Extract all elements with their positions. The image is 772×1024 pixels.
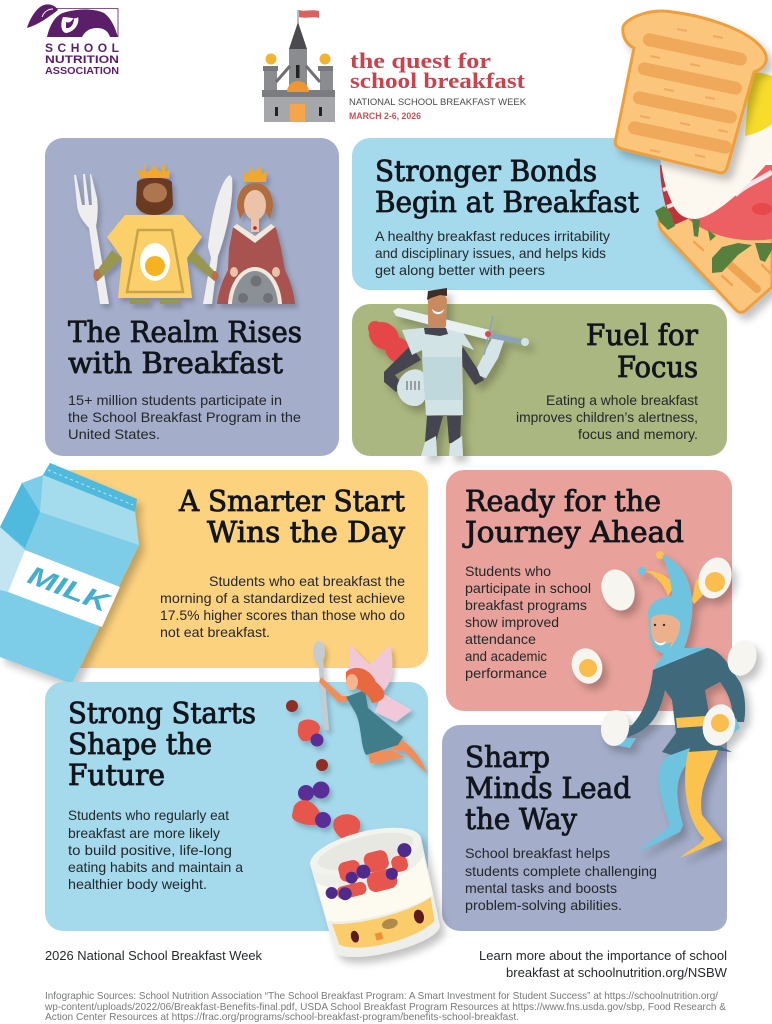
king bbox=[94, 164, 218, 304]
lettuce bbox=[655, 206, 772, 273]
illustration: milk carton bbox=[0, 463, 139, 684]
top toast bbox=[615, 11, 766, 173]
panel: Stronger Bonds bbox=[352, 138, 740, 290]
body text bbox=[68, 393, 301, 442]
footer call to action: Learn more about the importance of school bbox=[479, 949, 727, 963]
heading: Shape the bbox=[68, 727, 212, 761]
sources bbox=[44, 991, 726, 1023]
heading bbox=[586, 318, 698, 384]
heading: The Realm Rises bbox=[68, 315, 302, 349]
logo wordmark: NUTRITION bbox=[45, 54, 119, 66]
helmet bbox=[397, 369, 428, 406]
heading bbox=[465, 740, 631, 836]
body text: and academic bbox=[465, 649, 547, 664]
heading bbox=[375, 154, 639, 219]
body text: Students who eat breakfast the bbox=[209, 574, 405, 589]
logo: School Nutrition Association bbox=[27, 4, 119, 77]
body text: Students who bbox=[465, 564, 551, 579]
body text: performance bbox=[465, 666, 547, 681]
event title: NATIONAL SCHOOL BREAKFAST WEEK bbox=[349, 97, 527, 108]
body text: United States. bbox=[68, 427, 160, 442]
face bbox=[651, 614, 680, 650]
body text: 17.5% higher scores than those who do bbox=[160, 608, 405, 623]
heading: Future bbox=[68, 758, 165, 792]
footer call to action bbox=[479, 949, 727, 980]
body text: the School Breakfast Program in the bbox=[68, 410, 301, 425]
panel: Strong Starts bbox=[45, 682, 428, 931]
body text: A healthy breakfast reduces irritability bbox=[375, 229, 610, 244]
legs bbox=[638, 748, 690, 852]
body text bbox=[465, 846, 657, 913]
heading: Stronger Bonds bbox=[375, 154, 597, 188]
heading: Wins the Day bbox=[207, 515, 406, 549]
footer call to action: breakfast at schoolnutrition.org/NSBW bbox=[506, 966, 727, 980]
body text: attendance bbox=[465, 632, 536, 647]
panel: Ready for the Journey bbox=[446, 470, 732, 711]
body text bbox=[465, 564, 591, 681]
panel: A Smarter Start bbox=[55, 470, 428, 668]
plume bbox=[363, 316, 416, 368]
heading bbox=[462, 484, 684, 549]
heading: Strong Starts bbox=[68, 696, 256, 730]
body text: improves children’s alertness, bbox=[516, 410, 698, 425]
body text: students complete challenging bbox=[465, 864, 657, 879]
illustration: king, queen, fork and knife bbox=[74, 164, 295, 304]
heading bbox=[68, 696, 256, 792]
body text: breakfast programs bbox=[465, 598, 587, 613]
panel: The Realm Rises bbox=[45, 138, 339, 456]
heading bbox=[68, 315, 302, 380]
body text bbox=[375, 229, 610, 278]
body text: 15+ million students participate in bbox=[68, 393, 282, 408]
hood bbox=[648, 555, 707, 669]
heading: Focus bbox=[617, 350, 698, 384]
left arm bbox=[384, 345, 421, 392]
body text: participate in school bbox=[465, 581, 591, 596]
panel: Fuel for Focus bbox=[352, 304, 727, 456]
sword bbox=[393, 308, 490, 340]
heading: Sharp bbox=[465, 740, 550, 774]
heading: Ready for the bbox=[465, 484, 661, 518]
heading: Begin at Breakfast bbox=[375, 185, 639, 219]
body text: Students who regularly eat bbox=[68, 808, 229, 823]
icon: pelican bbox=[27, 4, 118, 37]
body text: healthier body weight. bbox=[68, 877, 207, 892]
milk label bbox=[8, 550, 120, 627]
heading: Minds Lead bbox=[465, 771, 631, 805]
head bbox=[428, 293, 447, 332]
illustration: parfait glass bbox=[305, 818, 446, 966]
heading: Fuel for bbox=[586, 318, 698, 352]
event logo: castle bbox=[262, 10, 335, 122]
body text: and disciplinary issues, and helps kids bbox=[375, 246, 606, 261]
spoon bbox=[313, 641, 325, 663]
hair and face bbox=[346, 668, 384, 703]
heading: A Smarter Start bbox=[178, 484, 405, 518]
legs bbox=[392, 737, 427, 773]
sources: wp-content/uploads/2022/06/Breakfast-Benefits-final.pdf, USDA School Breakfast Program Resources at https://www.fns.usda.gov/sbp, Food Research & bbox=[44, 1002, 726, 1013]
wings bbox=[348, 645, 412, 722]
heading bbox=[178, 484, 406, 549]
heading: Journey Ahead bbox=[462, 515, 684, 549]
sources: Infographic Sources: School Nutrition Association “The School Breakfast Program: A Smart Investment for Student Success” at https://schoolnutrition.org/ bbox=[45, 991, 718, 1002]
logo wordmark: ASSOCIATION bbox=[45, 65, 119, 77]
heading: with Breakfast bbox=[68, 346, 283, 380]
event title bbox=[349, 48, 527, 121]
body bbox=[622, 648, 745, 757]
body text: get along better with peers bbox=[375, 263, 545, 278]
armour bbox=[402, 328, 474, 415]
logo wordmark bbox=[45, 41, 119, 77]
body text: morning of a standardized test achieve bbox=[160, 591, 405, 606]
body text: Eating a whole breakfast bbox=[546, 393, 698, 408]
heading: the Way bbox=[465, 802, 578, 836]
body text: problem-solving abilities. bbox=[465, 898, 622, 913]
body text: breakfast are more likely bbox=[68, 826, 220, 841]
panel: Sharp Minds bbox=[442, 725, 727, 931]
dress bbox=[346, 690, 403, 755]
queen bbox=[217, 166, 295, 304]
body text: not eat breakfast. bbox=[160, 625, 270, 640]
illustration: sandwich bbox=[615, 11, 772, 312]
body text: eating habits and maintain a bbox=[68, 860, 243, 875]
body text: mental tasks and boosts bbox=[465, 881, 617, 896]
logo wordmark: SCHOOL bbox=[45, 41, 119, 55]
tomato bbox=[686, 165, 772, 240]
eggs bbox=[596, 565, 640, 615]
sources: Action Center Resources at https://frac.org/programs/school-breakfast-program/benefits-school-breakfast. bbox=[45, 1012, 519, 1023]
illustration: fairy with spoon bbox=[313, 641, 427, 773]
illustration: jester juggling eggs bbox=[567, 551, 761, 858]
event title: school breakfast bbox=[350, 68, 526, 93]
body text: to build positive, life-long bbox=[68, 843, 232, 858]
illustration: knight bbox=[363, 288, 529, 456]
right arm bbox=[458, 347, 484, 385]
event title: MARCH 2-6, 2026 bbox=[349, 111, 421, 121]
event title: the quest for bbox=[350, 48, 491, 73]
footer left note: 2026 National School Breakfast Week bbox=[45, 949, 263, 963]
yolk bbox=[745, 72, 772, 136]
legs bbox=[425, 416, 461, 443]
arm bbox=[319, 677, 350, 702]
illustration: berries bbox=[286, 700, 360, 842]
body text bbox=[68, 808, 243, 892]
body text: show improved bbox=[465, 615, 559, 630]
body text bbox=[516, 393, 698, 442]
egg white bbox=[659, 90, 772, 219]
bottom toast bbox=[659, 180, 772, 312]
body text: focus and memory. bbox=[578, 427, 698, 442]
hands bbox=[615, 738, 636, 748]
hat bbox=[645, 571, 675, 596]
body text bbox=[160, 574, 405, 640]
body text: School breakfast helps bbox=[465, 846, 610, 861]
knife bbox=[203, 175, 232, 304]
milk label: MILK bbox=[24, 560, 116, 619]
fork bbox=[74, 174, 109, 304]
bacon bbox=[660, 165, 692, 226]
